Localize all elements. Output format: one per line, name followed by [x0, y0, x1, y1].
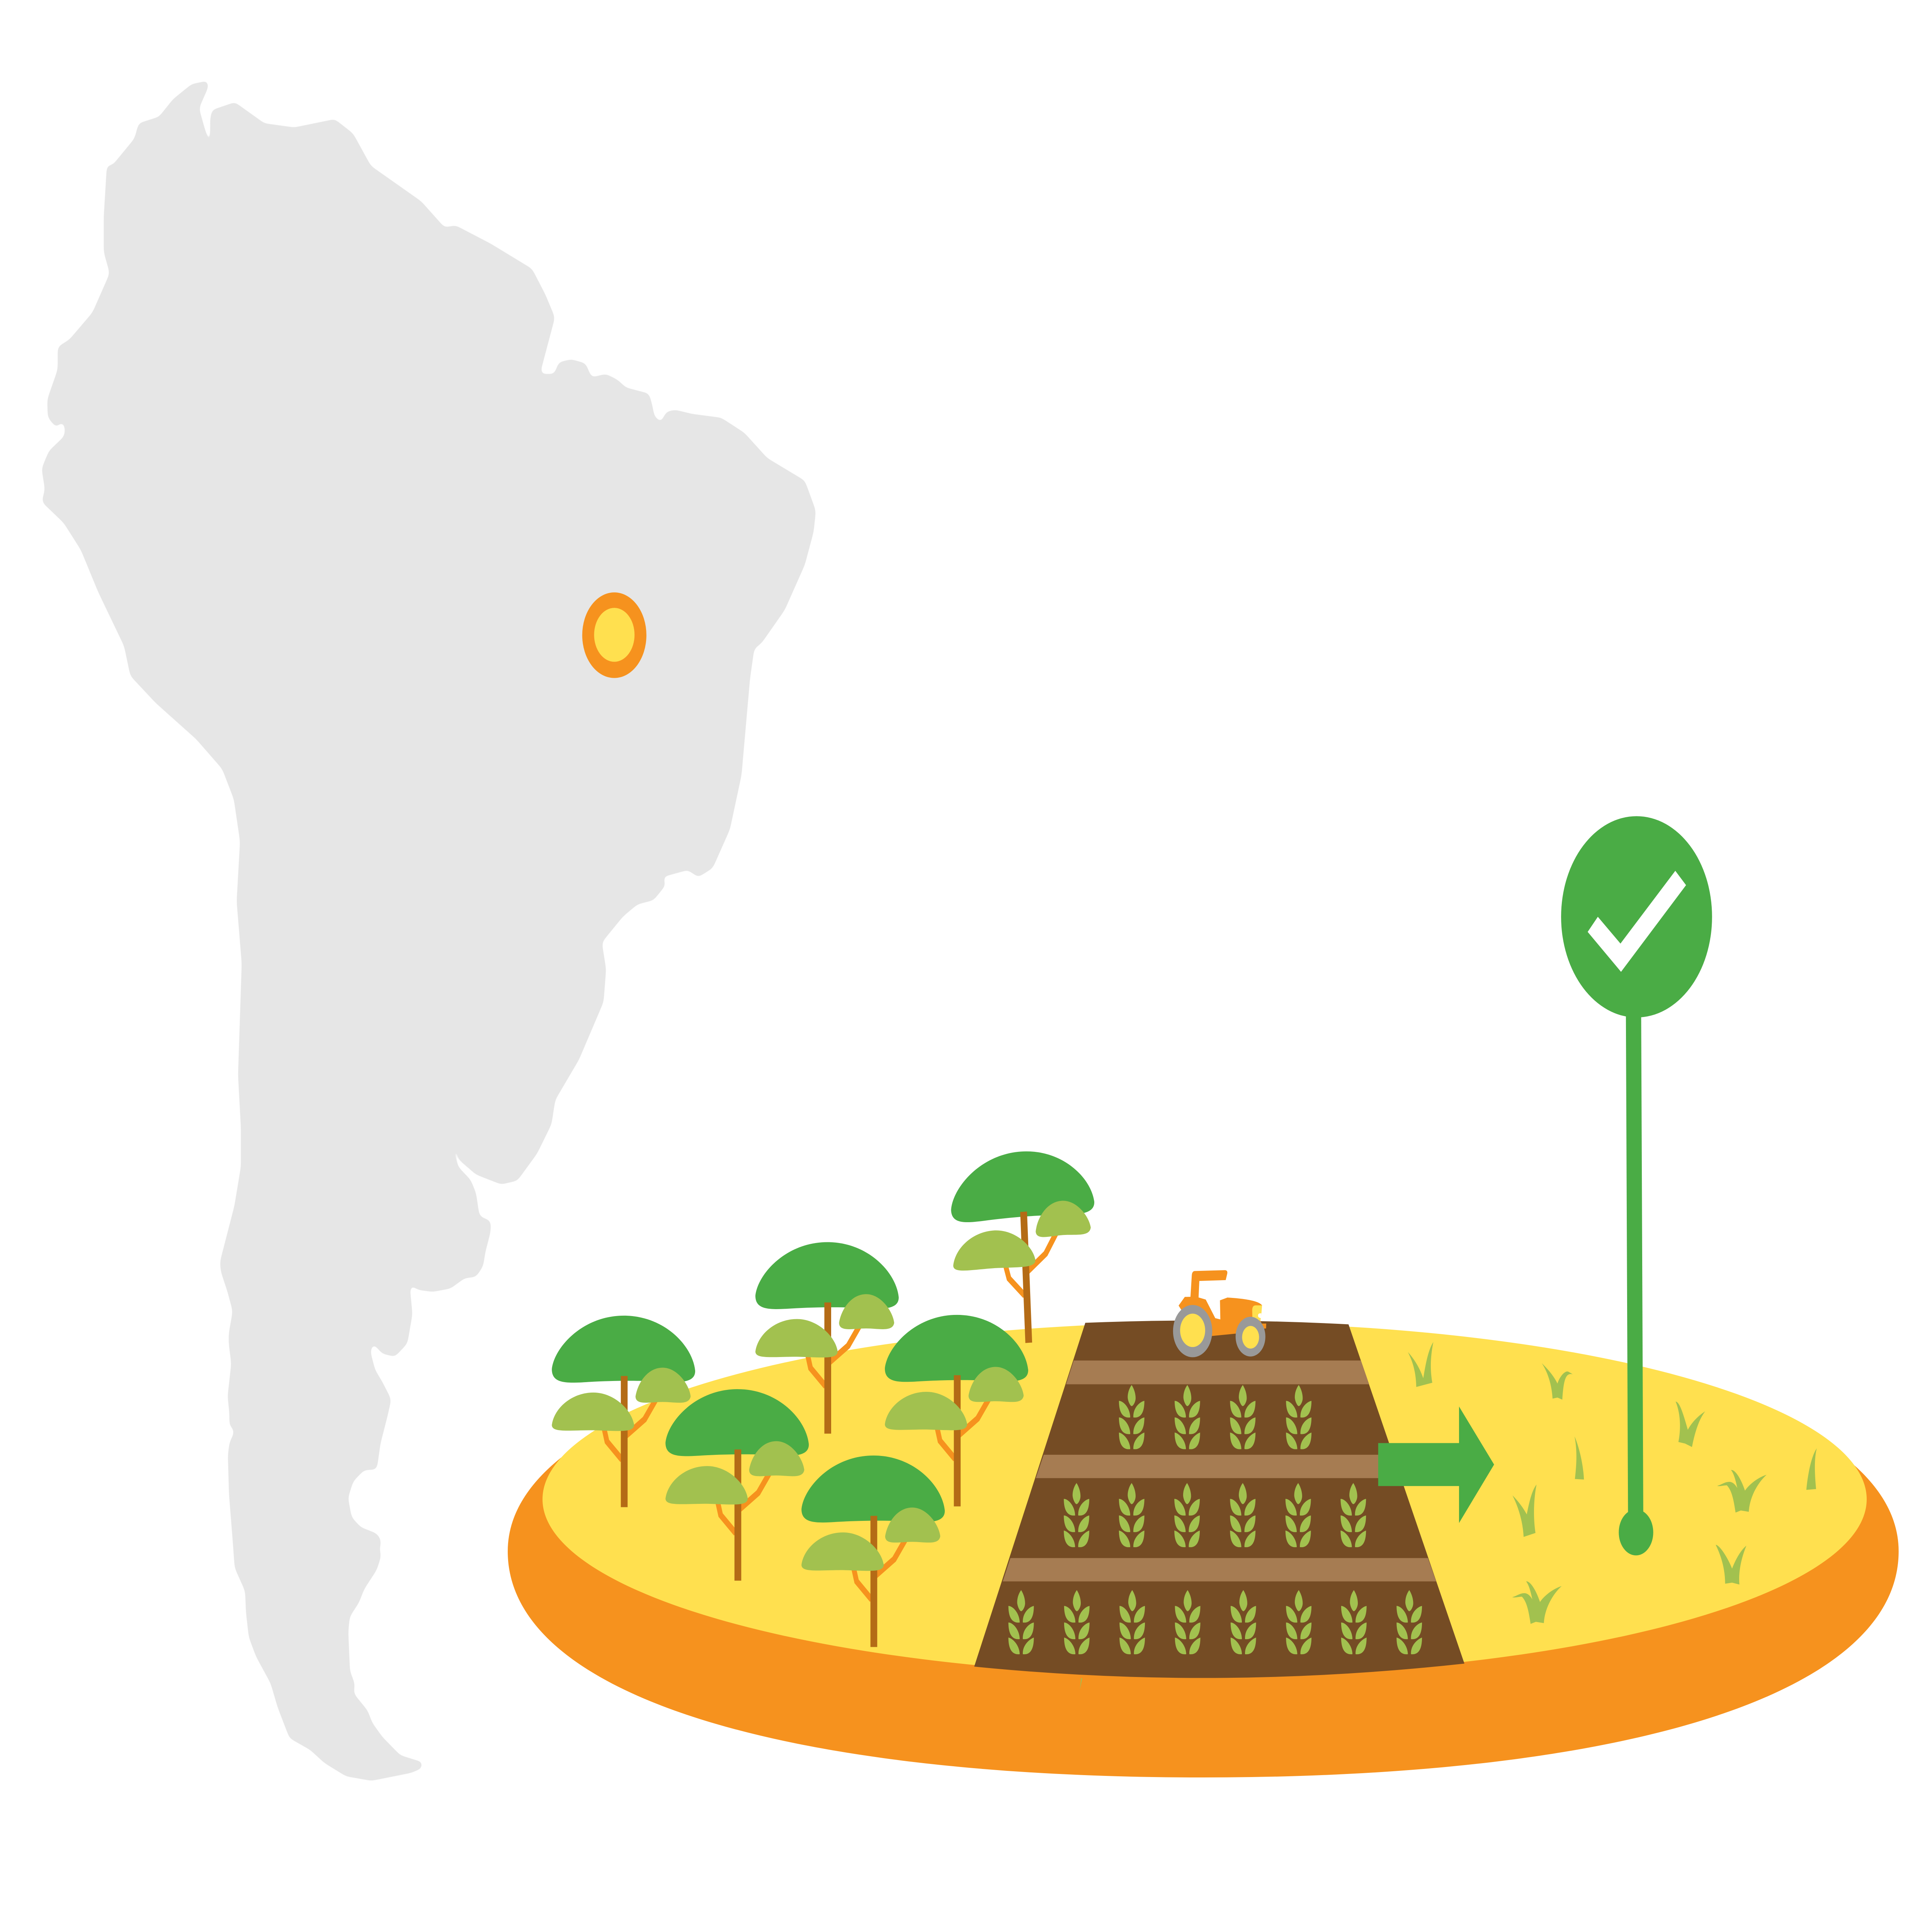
wheat row 2 — [1064, 1483, 1366, 1547]
sign disc — [1561, 816, 1712, 1017]
grass 2 — [1542, 1363, 1573, 1400]
grass 9 — [1512, 1581, 1561, 1624]
tree 1: left — [552, 1316, 695, 1507]
grass 6 — [1717, 1470, 1767, 1513]
grass 5 — [1512, 1485, 1537, 1537]
wheat row 3 — [1009, 1590, 1422, 1654]
soil — [974, 1320, 1464, 1678]
tree 2: top middle — [755, 1242, 899, 1434]
icon: tractor — [1173, 1270, 1266, 1357]
grass 3 — [1675, 1401, 1705, 1447]
tractor body — [1179, 1270, 1266, 1336]
sign post with check mark — [1561, 816, 1712, 1555]
soil band 2 — [1036, 1455, 1400, 1478]
tractor grille — [1252, 1305, 1262, 1321]
grass tufts — [1408, 1342, 1817, 1624]
post base — [1619, 1509, 1653, 1555]
soil band 1 — [1066, 1361, 1369, 1384]
tree 4: lower middle — [665, 1389, 809, 1581]
grass 7 — [1806, 1448, 1817, 1490]
tree 6: top right — [949, 1146, 1100, 1348]
wheat row 1 — [1119, 1385, 1311, 1449]
tree 3: right — [885, 1315, 1028, 1507]
map: South America — [42, 81, 816, 1781]
grass 4 — [1575, 1436, 1584, 1480]
icon: check mark — [1588, 871, 1686, 972]
arrow — [1378, 1406, 1494, 1523]
grass 8 — [1716, 1545, 1747, 1585]
platform: yellow land — [543, 1322, 1867, 1676]
rear wheel — [1173, 1305, 1212, 1357]
post — [1626, 999, 1643, 1531]
platform: orange base — [508, 1324, 1899, 1777]
farmed field — [974, 1320, 1464, 1678]
tiny grass sliver on base — [1080, 1678, 1082, 1690]
location marker — [582, 592, 646, 678]
front wheel — [1236, 1317, 1265, 1357]
grille notch — [1258, 1313, 1261, 1318]
soil band 3 — [1003, 1558, 1436, 1582]
tree 5: bottom — [801, 1456, 945, 1647]
grass 1 — [1408, 1342, 1434, 1387]
